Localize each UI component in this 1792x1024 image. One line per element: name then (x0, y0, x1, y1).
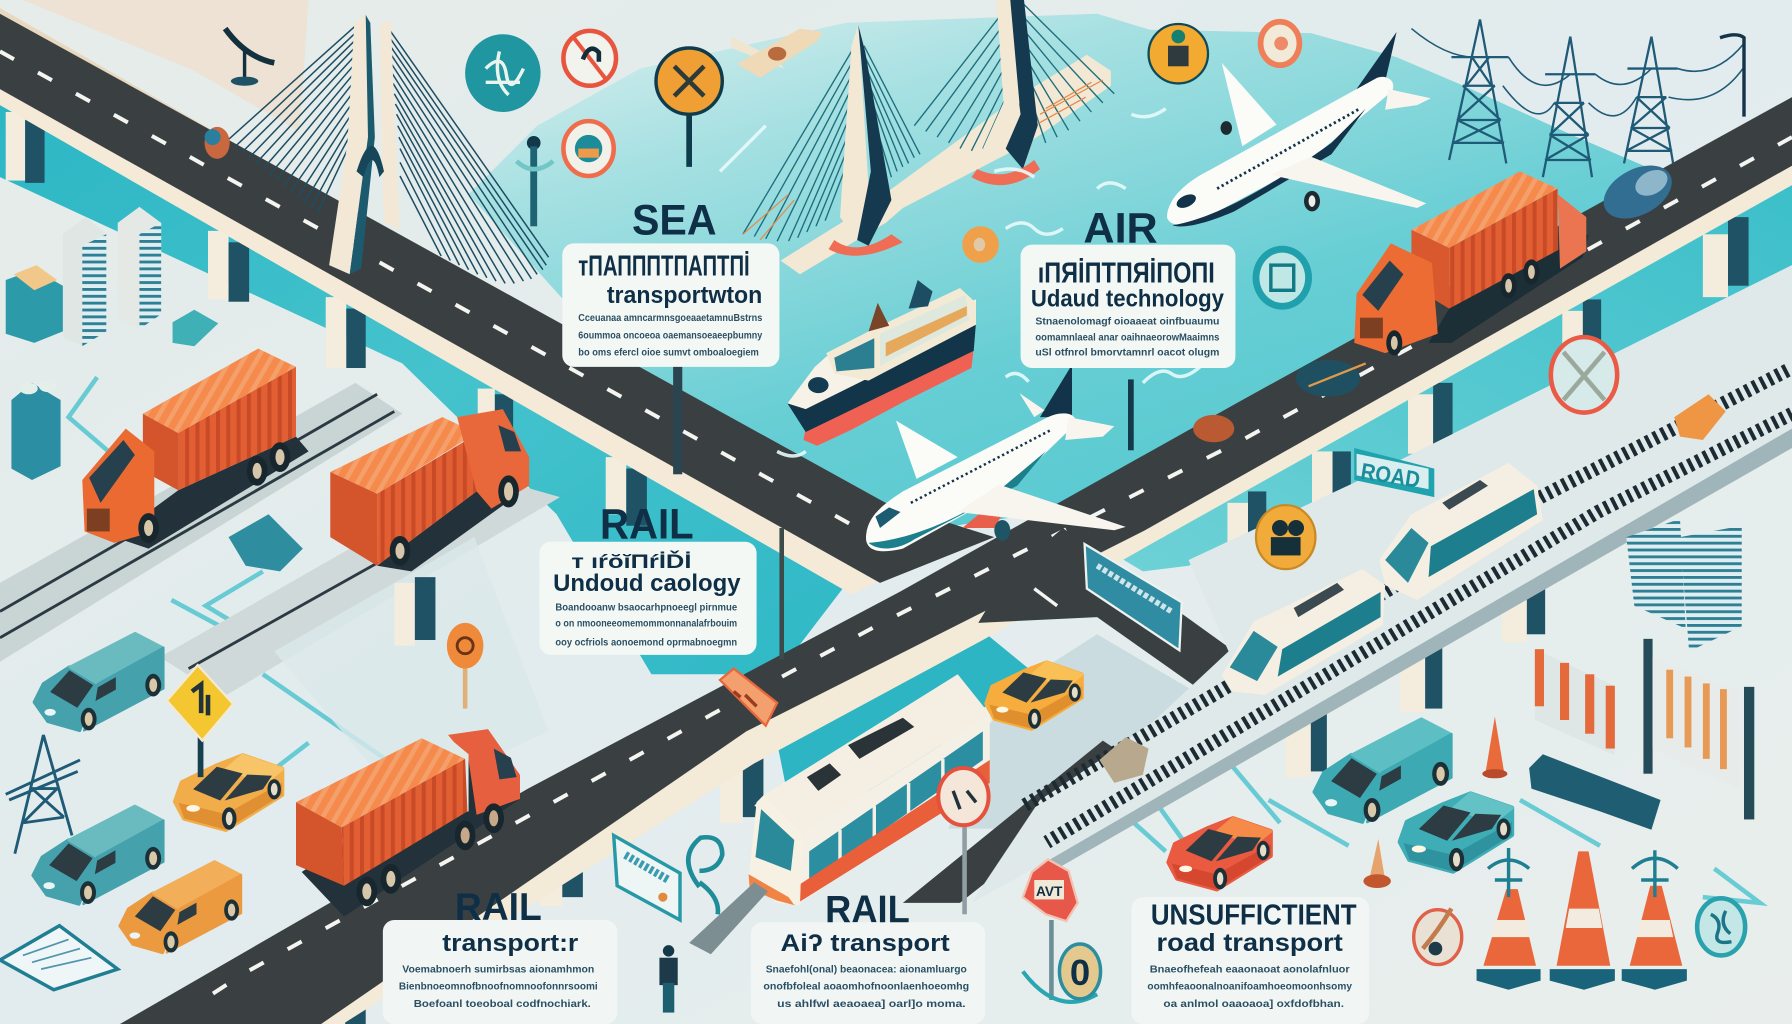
plane lower (866, 365, 1126, 551)
right towers (1626, 519, 1742, 651)
band: left rail deck 1 (0, 383, 402, 662)
card air transport (751, 922, 985, 1024)
card rail (539, 542, 757, 655)
body: Boefoanl toeoboal codfnochiark. (414, 999, 591, 1010)
heading rail: RAIL (455, 886, 542, 929)
cone left (1477, 848, 1541, 990)
wreck small (1193, 415, 1234, 442)
cone middle (1550, 851, 1615, 990)
barrier (1529, 754, 1661, 830)
sea (469, 14, 1657, 537)
body: onofbfoleal aoaomhofnoonlaenhoeomhg (763, 982, 969, 993)
body: us ahlfwl aeaoaea] oarl]o moma. (777, 999, 966, 1010)
panel: rail middle (539, 500, 757, 655)
body (399, 965, 598, 1010)
orange debris (1674, 394, 1726, 440)
truck 3 (1354, 171, 1589, 355)
bus on rail upper (1379, 463, 1543, 600)
water under road A (0, 103, 851, 674)
van orange (120, 861, 241, 953)
car teal (1400, 794, 1512, 871)
rail car wreck (1099, 737, 1149, 783)
pale ground plaza (949, 634, 1194, 829)
panel: air (1021, 204, 1235, 368)
truck 1 (82, 349, 309, 549)
icon: small red ring (563, 121, 614, 176)
body sea (578, 313, 763, 358)
wreck on road (1296, 360, 1366, 397)
red sign on post (938, 768, 989, 914)
body: Bnaeofhefeah eaaonaoat aonolafnluor (1150, 965, 1350, 976)
body rail: Boandooanw bsaocarhpnoeegl pirnmue (555, 602, 738, 613)
wreck left road (205, 127, 230, 159)
red billboard bars (1535, 649, 1615, 755)
icon: teal circle (465, 34, 541, 112)
heading rail: RAIL (825, 888, 910, 931)
card sea (562, 243, 779, 367)
card rail transport (383, 920, 617, 1024)
post under air box (1128, 379, 1134, 450)
subtitle air 1: ıПЯİПТПЯİПОПI (1038, 257, 1215, 289)
ring icon (688, 837, 722, 914)
road tag: ROAD (1359, 458, 1422, 493)
truck 2 (330, 409, 529, 571)
body air: Stnaenolomagf oioaaeat oinfbuaumu (1035, 317, 1220, 328)
striped board (1643, 639, 1754, 819)
info board (614, 835, 680, 920)
cone right (1622, 850, 1687, 990)
icon: orange disc (962, 226, 999, 263)
power tower left (6, 735, 80, 854)
post under sea box (673, 366, 682, 474)
body rail (555, 602, 738, 649)
small cone 2 (1363, 839, 1391, 888)
panel: sea (562, 196, 779, 367)
octagon sign: AVT (1036, 884, 1063, 899)
heading rail: RAIL (600, 500, 694, 547)
pillars under road B and rail deck (318, 217, 1749, 1024)
heading unsufficient: UNSUFFICTIENT (1151, 900, 1357, 932)
subtitle sea 1: тПАПППТПАПТПİ (578, 250, 750, 282)
dash on branch (1034, 589, 1057, 606)
water under junction (777, 627, 1029, 800)
icon: yellow circle (1149, 24, 1208, 83)
yellow diamond sign (167, 665, 233, 777)
water streaks (69, 377, 1760, 903)
pier panel beneath left deck (274, 537, 549, 800)
car yellow (986, 662, 1082, 729)
car orange left (175, 755, 282, 830)
body: oomhfeaoonalnoanifoamhoeomoonhsomy (1147, 982, 1353, 993)
heading sea: SEA (632, 196, 717, 243)
panel: rail transport (383, 886, 617, 1024)
road tag (1354, 448, 1434, 497)
sea waves (720, 109, 1200, 456)
car red (1169, 818, 1271, 889)
billboard junction (1085, 544, 1182, 650)
truck 4 (296, 729, 520, 917)
body: Voemabnoerh sumirbsas aionamhmon (402, 965, 594, 976)
heading air: AIR (1083, 204, 1158, 251)
train (749, 674, 990, 905)
subtitle air 2: Udaud technology (1031, 285, 1225, 312)
round zero sign: 0 (1070, 952, 1090, 993)
body rail: ooy ocfriols aonoemond oprmabnoegmn (555, 638, 737, 649)
post near rail box (779, 528, 784, 659)
book (0, 926, 118, 990)
panel: air transport (751, 888, 985, 1024)
icon: red ring x (1551, 337, 1617, 413)
band: left rail deck 2 (160, 474, 560, 697)
pillars under road A (6, 112, 647, 526)
van teal upper left (34, 633, 163, 730)
plane upper (1167, 32, 1431, 227)
body: oa anlmol oaaoaoa] oxfdofbhan. (1163, 999, 1344, 1010)
rail deck (971, 265, 1792, 903)
icon: orange x sign (656, 48, 722, 167)
person (659, 945, 678, 1013)
road A (0, 8, 994, 594)
teal debris (229, 514, 303, 571)
subtitle rail 1: т ıŕŏĭПŕİĎİ (571, 549, 691, 573)
body rail: o on nmooneeomemommonnanalafrbouim (555, 618, 737, 629)
octagon sign (1023, 859, 1078, 1000)
van teal lower left (33, 806, 163, 904)
icon: no sign (563, 31, 616, 86)
subtitle road transport: road transport (1157, 929, 1344, 957)
body (1147, 965, 1353, 1010)
card air (1021, 245, 1235, 368)
orange road sign (720, 669, 777, 726)
tan wash top left (23, 0, 309, 131)
water between road B and rail deck (1086, 183, 1792, 571)
icon: orange ring (1261, 22, 1299, 65)
bus on rail lower (1222, 569, 1385, 695)
road branch C (978, 528, 1234, 686)
round zero sign (1023, 944, 1101, 1002)
propeller aircraft (731, 29, 823, 78)
body sea: Cceuanaa amncarmnsgoeaaetamnuBstrns (578, 313, 762, 324)
body: Bienbnoeomnofbnoofnomnoofonnrsoomi (399, 982, 598, 993)
body air (1035, 317, 1220, 358)
body: Snaefohl(onal) beaonacea: aionamluargo (766, 965, 967, 976)
card road transport (1131, 897, 1369, 1024)
body (763, 965, 969, 1010)
icon: teal badge (1697, 898, 1745, 955)
road D (903, 741, 1137, 903)
body sea: bo oms efercl oioe sumvt omboaloegiem (578, 347, 759, 358)
ship (787, 280, 976, 446)
subtitle transport: transport:r (442, 930, 578, 957)
escalator car (689, 882, 768, 954)
small cone 1 (1482, 717, 1507, 778)
icon: teal circle air (1253, 246, 1312, 310)
van teal right (1314, 719, 1451, 822)
city towers left (6, 207, 218, 480)
tanker (1595, 155, 1681, 229)
body sea: 6oummoa oncoeoa oaemansoeaeepbumny (578, 330, 763, 341)
bridge right (743, 0, 1114, 274)
subtitle rail 2: Undoud caology (553, 570, 741, 597)
bridge left (229, 15, 549, 283)
power towers top right (1411, 19, 1744, 177)
panel: road transport (1131, 897, 1369, 1024)
icon: stand (225, 29, 274, 86)
body air: oomamnlaeal anar oaihnaeorowMaaimns (1035, 333, 1219, 344)
body air: uSl otfnrol bmorvtamnrl oacot olugm (1035, 347, 1220, 358)
yellow circle sign (1256, 505, 1315, 569)
icon: post figure (517, 136, 553, 226)
orange circle sign (447, 623, 483, 709)
subtitle sea 2: transportwton (607, 282, 762, 309)
icon: bottom red ring (1414, 909, 1462, 965)
subtitle air transport: Aiʔ transport (781, 930, 950, 957)
